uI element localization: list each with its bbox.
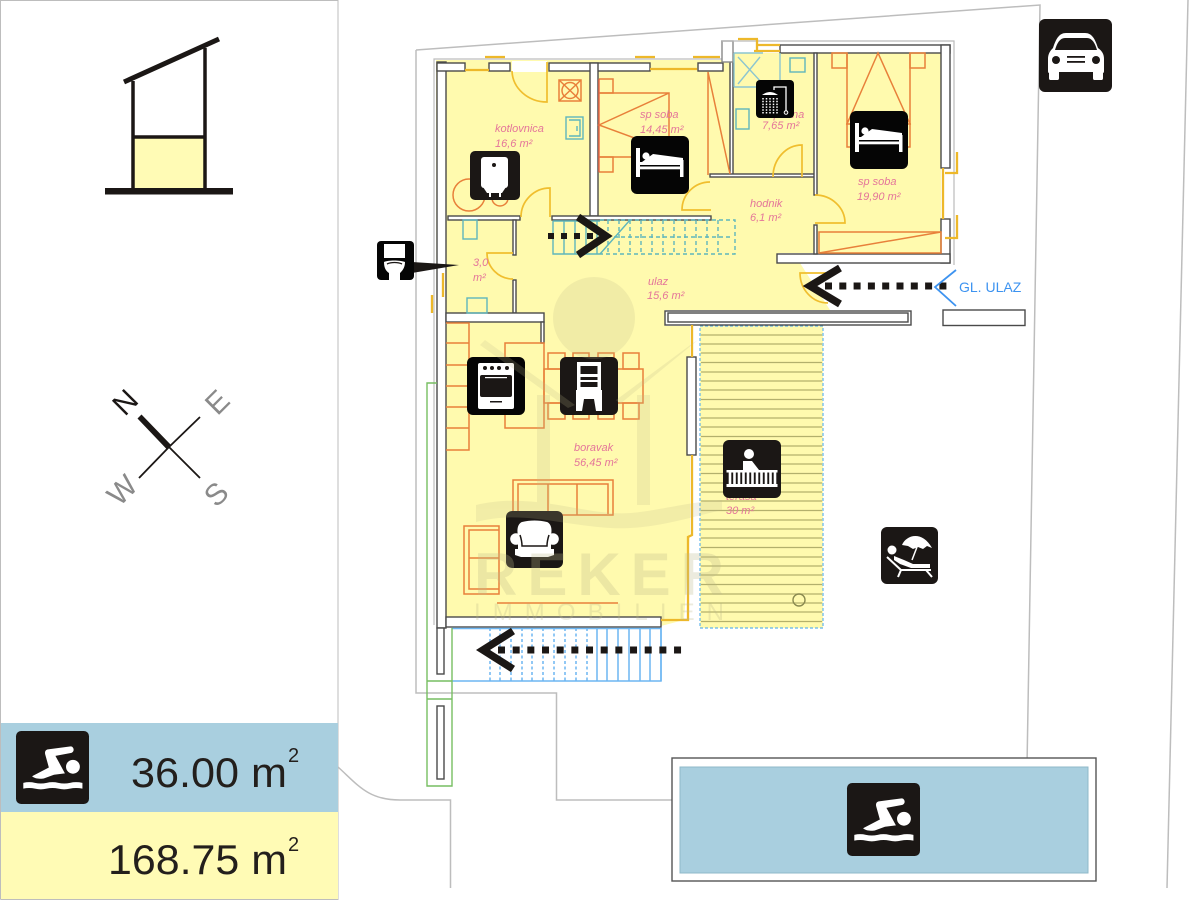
room labels: 19,90 m² — [857, 191, 901, 203]
left panel frame — [0, 0, 338, 900]
arrow: garden exit — [483, 631, 682, 669]
room labels — [473, 109, 901, 517]
icon: toilet with pointer — [377, 241, 459, 280]
icon: car — [1039, 19, 1112, 92]
room labels: boravak — [574, 442, 614, 454]
furniture: lounge — [464, 480, 618, 603]
room labels: 6,1 m² — [750, 212, 782, 224]
icon: swimmer (panel) — [16, 731, 89, 804]
room labels: 3,0 — [473, 257, 489, 269]
panel: pool area — [1, 723, 338, 812]
room labels: 7,65 m² — [762, 120, 800, 132]
room labels: hodnik — [750, 198, 783, 210]
panel: pool area: 36.00 m — [131, 749, 287, 796]
section house diagram — [105, 39, 233, 194]
compass — [101, 383, 236, 513]
terrace glazing — [661, 455, 692, 620]
windows — [432, 39, 957, 357]
boiler room fixtures — [453, 80, 583, 211]
icon: bed (room 1) — [631, 136, 689, 194]
watermark logo — [476, 277, 722, 528]
room labels: 15,6 m² — [647, 290, 685, 302]
watermark text: REKER — [474, 541, 724, 608]
yellow living area — [436, 53, 941, 626]
outdoor stairs — [452, 628, 661, 681]
terrace — [700, 326, 823, 628]
outer frame of the bedroom wing — [722, 41, 954, 265]
icon: sun lounger — [881, 527, 938, 584]
icon: armchair — [506, 511, 563, 568]
staircase — [553, 220, 735, 254]
icon: oven — [467, 357, 525, 415]
arrow: stairs — [548, 217, 606, 255]
pool — [672, 758, 1096, 881]
green planter outline — [427, 383, 452, 786]
walls — [437, 41, 1025, 779]
compass: N — [106, 383, 145, 422]
room labels: 56,45 m² — [574, 457, 618, 469]
panel: living area: 168.75 m — [108, 836, 287, 883]
door opening at the boiler room — [512, 61, 547, 72]
doors — [487, 62, 845, 303]
room labels: sp soba — [858, 176, 897, 188]
watermark text: IMMOBILIEN — [474, 599, 724, 626]
room labels: 16,6 m² — [495, 138, 533, 150]
compass: S — [198, 476, 235, 513]
icon: dining chairs — [560, 357, 618, 415]
panel: living area — [1, 812, 338, 899]
panel: pool area: 2 — [288, 745, 299, 767]
icon: bed (room 2) — [850, 111, 908, 169]
room labels: sp soba — [640, 109, 679, 121]
entrance label: GL. ULAZ — [959, 279, 1022, 295]
icon: shower — [756, 80, 794, 118]
room labels: 14,45 m² — [640, 124, 684, 136]
room labels: kotlovnica — [495, 123, 544, 135]
compass: E — [199, 384, 236, 421]
room labels: terasa — [726, 491, 757, 503]
room labels: 30 m² — [726, 505, 754, 517]
outer light wall lines — [434, 59, 722, 625]
arrow: main entrance — [810, 268, 956, 306]
icon: swimmer (pool) — [847, 783, 920, 856]
icon: water heater — [470, 151, 520, 200]
room labels: kupaona — [762, 109, 804, 121]
site boundary lines — [338, 0, 1188, 888]
furniture: bedrooms — [599, 53, 941, 253]
furniture: kitchen and dining — [446, 323, 643, 450]
room labels: ulaz — [648, 276, 669, 288]
panel: living area: 2 — [288, 834, 299, 856]
room labels: m² — [473, 272, 486, 284]
compass: W — [101, 469, 145, 512]
icon: balcony — [723, 440, 781, 498]
bathroom fixtures — [463, 53, 805, 313]
